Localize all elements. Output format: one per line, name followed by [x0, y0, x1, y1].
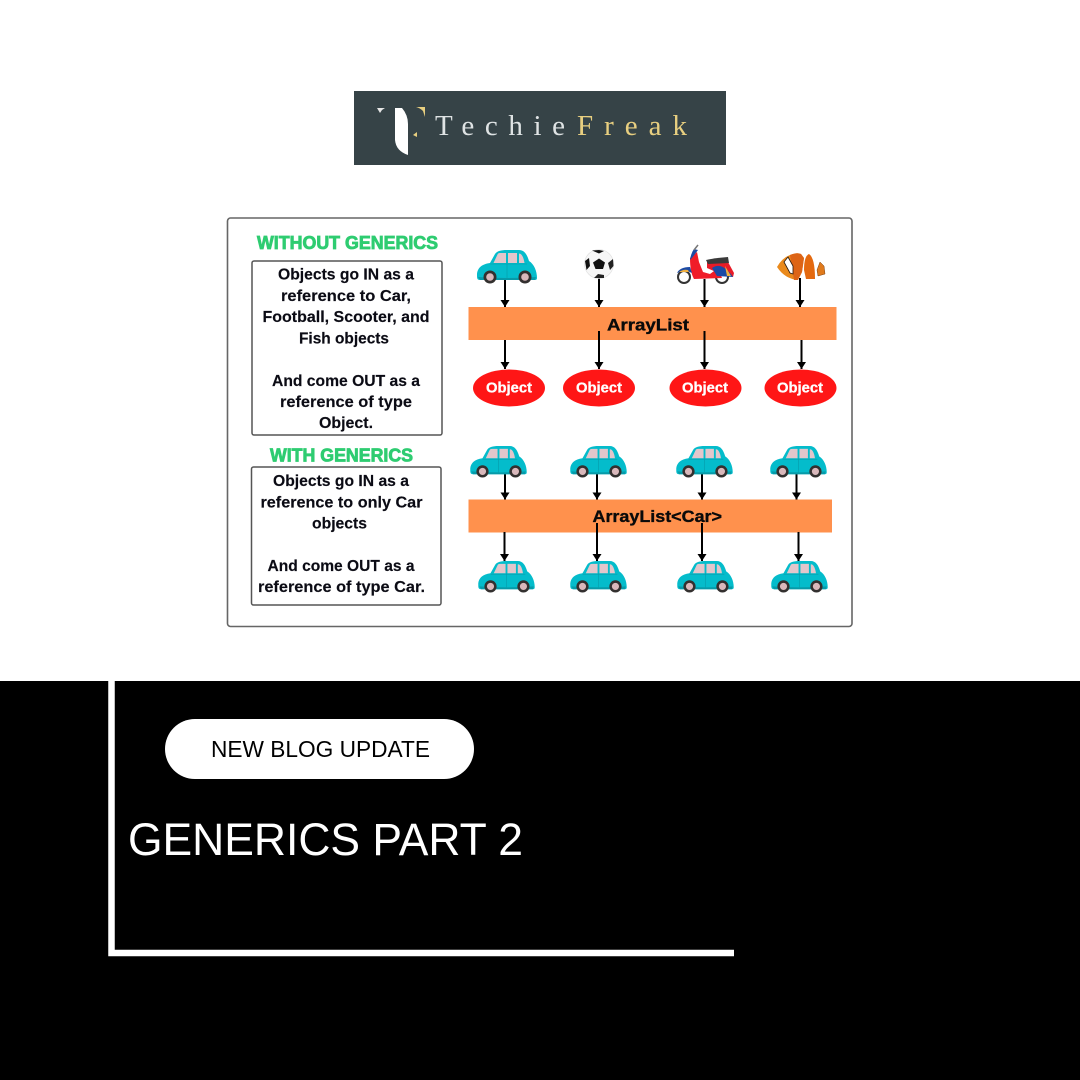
text box: with generics: Objects go IN as a [273, 473, 409, 490]
text box: with generics: reference to only Car [260, 494, 422, 512]
panel: generics diagram [228, 218, 852, 626]
text box: without generics [252, 261, 442, 435]
title: GENERICS PART 2 [128, 814, 523, 865]
logo wordmark: Techie [435, 110, 565, 142]
icon: scooter [677, 245, 734, 283]
icon: car [477, 250, 537, 284]
bar: ArrayList [468, 307, 836, 340]
bar: ArrayList of Car: ArrayList<Car> [592, 507, 722, 526]
bar: ArrayList of Car [468, 500, 832, 532]
ellipse: Object 1 [473, 370, 545, 406]
badge: new blog update [165, 719, 474, 779]
bar: ArrayList: ArrayList [607, 316, 689, 334]
icon: football [584, 250, 614, 278]
footer panel [0, 681, 1080, 1080]
text box: without generics: reference to Car, [281, 288, 411, 305]
arrows: out of ArrayList of Car [504, 523, 798, 561]
text box: with generics: And come OUT as a [268, 558, 415, 575]
text box: with generics: reference of type Car. [258, 579, 425, 596]
arrows: out of ArrayList [505, 331, 802, 369]
arrows: into ArrayList of Car [505, 473, 796, 500]
text box: without generics: Football, Scooter, and [262, 309, 430, 326]
ellipse: Object 1: Object [486, 381, 532, 397]
text box: with generics: objects [312, 516, 367, 532]
text box: without generics: reference of type [280, 394, 412, 411]
logo wordmark [435, 110, 688, 142]
text box: without generics: Objects go IN as a [278, 266, 414, 284]
frame line [112, 681, 734, 953]
ellipse: Object 2: Object [576, 381, 622, 397]
arrows: into ArrayList [505, 278, 800, 307]
heading: with generics: WITH GENERICS [270, 446, 413, 466]
text box: with generics [252, 467, 441, 605]
icons: cars entering [470, 446, 827, 478]
ellipse: Object 4: Object [777, 381, 823, 397]
text box: without generics: Object. [319, 415, 373, 432]
ellipse: Object 4 [764, 370, 836, 406]
icon: clownfish [777, 253, 825, 280]
text box: without generics: And come OUT as a [272, 373, 420, 390]
ellipse: Object 2 [563, 370, 635, 406]
heading: without generics: WITHOUT GENERICS [257, 233, 438, 253]
badge: new blog update: NEW BLOG UPDATE [211, 736, 430, 762]
logo wordmark: Freak [577, 110, 688, 142]
logo mark [377, 107, 425, 155]
text box: without generics: Fish objects [299, 330, 389, 348]
logo banner [354, 91, 726, 165]
ellipse: Object 3 [670, 370, 742, 406]
ellipse: Object 3: Object [682, 381, 728, 397]
icons: cars leaving [478, 561, 828, 593]
